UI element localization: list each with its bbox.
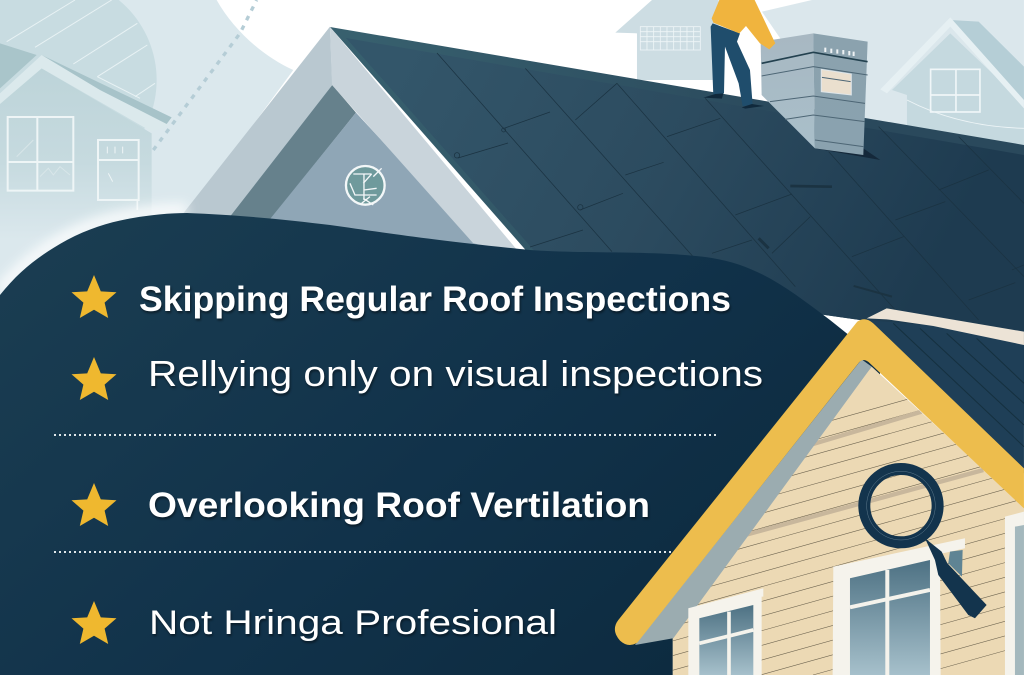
faded house right [880,17,1024,145]
chimney [761,33,880,160]
large window [833,538,965,675]
main dark shingled roof [330,27,1024,420]
circular diagram behind house [0,0,156,129]
pale sky band [762,0,1024,147]
background scene: right neighbourhood [615,0,1024,147]
item text: Overlooking Roof Vertilation [148,486,650,525]
left gable face [183,27,332,220]
siding lines [672,399,1016,675]
glow along panel edge [0,210,187,292]
right roof slope [867,320,1024,473]
right window edge [1005,512,1024,675]
roof seam lines [437,53,1024,320]
dotted divider one [54,434,716,436]
faded house left [0,43,172,240]
inspector figure [703,0,775,109]
star icon [72,357,116,400]
house front with yellow gable [615,308,1024,675]
dotted divider two [54,551,672,553]
star icon [72,601,116,644]
icon: magnifying glass [864,469,987,618]
list item 3 [72,483,650,526]
dark text panel [0,213,880,675]
heading text: Skipping Regular Roof Inspections [139,280,731,319]
shadow band [230,85,356,220]
list item 4 [72,601,557,644]
trousers [711,23,753,106]
item text: Not Hringa Profesional [149,604,557,642]
list item 1 [72,275,731,319]
cream roof trim [867,308,1024,345]
small window [688,588,763,675]
grey under-fascia [635,359,872,645]
yellow fascia [615,319,1024,645]
background scene: left neighbourhood [0,0,293,300]
shoes [703,93,764,109]
yellow sweater [712,0,775,49]
pale background blob [0,0,293,300]
gable of main roof [183,27,480,247]
item text: Rellying only on visual inspections [148,353,763,394]
dotted survey line [153,0,257,150]
star icon [72,275,116,318]
siding wall [673,367,1024,675]
faded house centre [615,0,719,80]
list item 2 [72,353,763,400]
right fascia of main gable [330,27,523,257]
small roof lines [893,323,1024,447]
inner gable triangle [267,113,480,247]
star icon [72,483,116,526]
icon: round vent [346,166,385,205]
